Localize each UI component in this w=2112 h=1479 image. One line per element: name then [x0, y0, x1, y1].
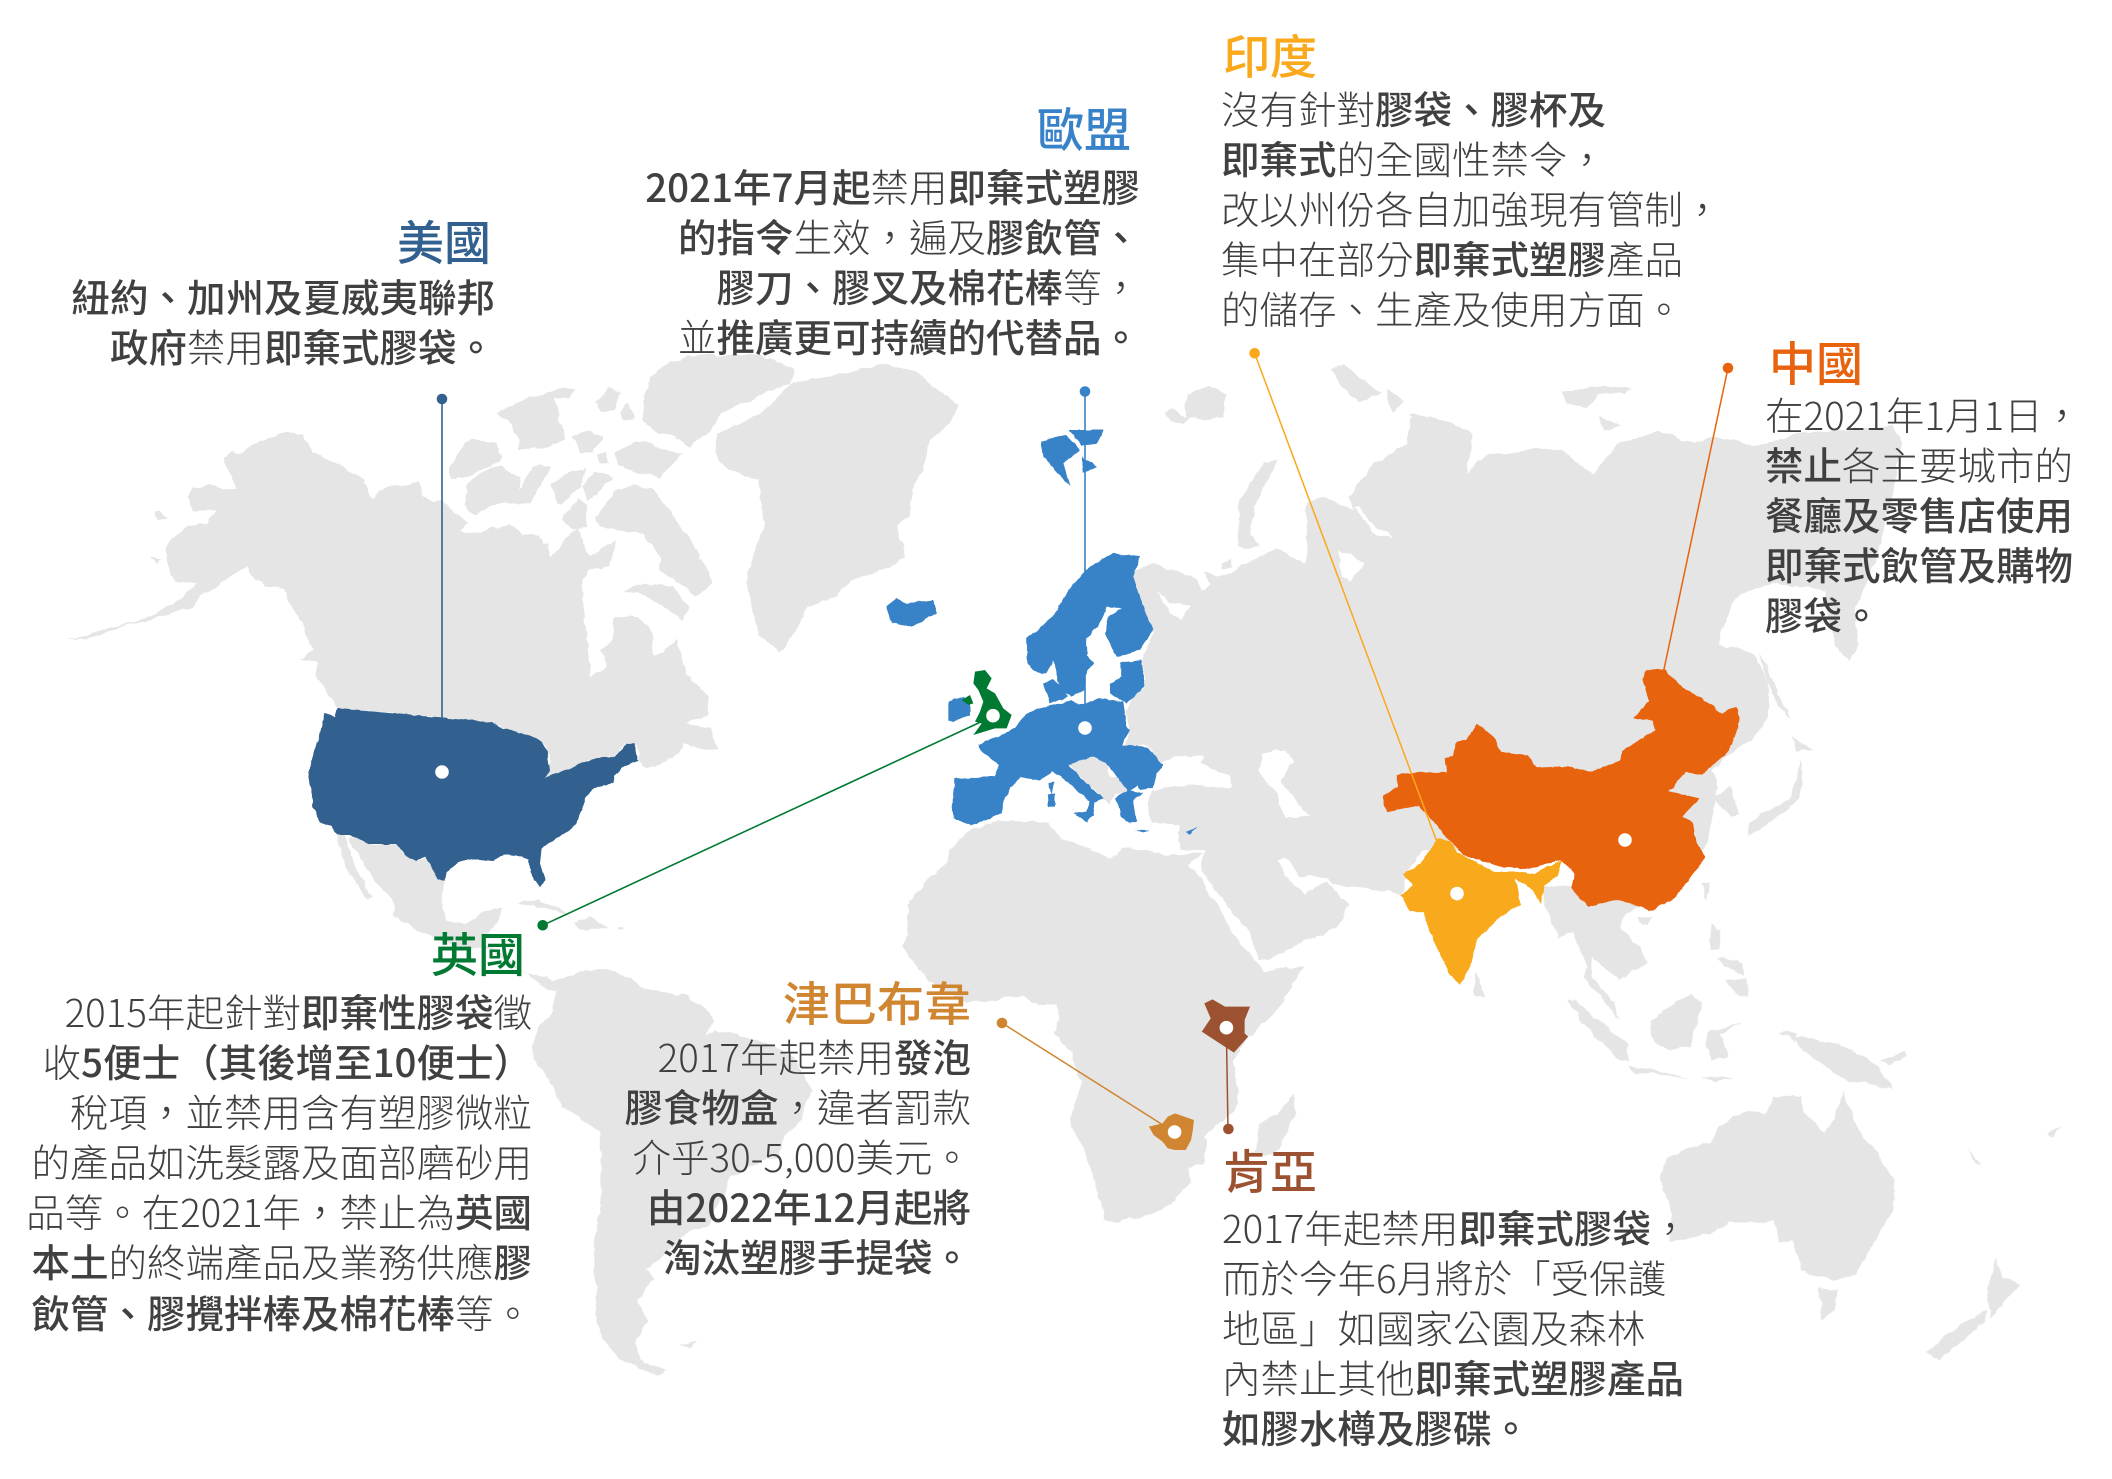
- Iceland: [886, 598, 937, 627]
- text: 津巴布韋: 由2022年12月起將: [647, 1178, 971, 1234]
- text: 中國: 餐廳及零售店使用: [1765, 486, 2073, 542]
- text: 印度: 的儲存、生產及使用方面。: [1221, 280, 1683, 336]
- text: 中國: 膠袋。: [1765, 586, 1881, 642]
- text: 英國: 本土的終端產品及業務供應膠: [31, 1233, 532, 1289]
- text: 歐盟: [645, 158, 1140, 364]
- text: 津巴布韋: 介乎30-5,000美元。: [632, 1128, 971, 1184]
- Africa, Madagascar, Middle East: [904, 820, 1460, 1222]
- China shape: [1383, 669, 1740, 912]
- text: 印度: 集中在部分即棄式塑膠產品: [1221, 230, 1683, 286]
- European Union: [886, 386, 1197, 834]
- text: 中國: 即棄式飲管及購物: [1765, 536, 2073, 592]
- text: 歐盟: 的指令生效，遍及膠飲管、: [678, 208, 1140, 264]
- East Asia islands, South Asia: [1474, 652, 1814, 997]
- text: 津巴布韋: 膠食物盒，違者罰款: [624, 1078, 971, 1134]
- text: 津巴布韋: 淘汰塑膠手提袋。: [663, 1228, 971, 1284]
- Kenya leader line: [1227, 1045, 1228, 1129]
- text: 中國: [1765, 386, 2081, 642]
- North America east and Arctic islands: [423, 355, 960, 777]
- Greenland: [715, 363, 960, 652]
- text: 英國: 飲管、膠攪拌棒及棉花棒等。: [31, 1284, 532, 1340]
- text: 津巴布韋: [624, 1028, 971, 1284]
- text: 印度: [1221, 80, 1722, 336]
- panel: 印度: [1206, 19, 1722, 1046]
- Zimbabwe leader line: [1002, 1023, 1163, 1125]
- heading: 印度: 印度: [1223, 19, 1317, 88]
- text: 歐盟: 並推廣更可持續的代替品。: [678, 308, 1140, 364]
- EU leader line: [1084, 391, 1086, 728]
- Kenya: [1202, 999, 1250, 1134]
- heading: 歐盟: 歐盟: [1037, 92, 1131, 161]
- text: 印度: 沒有針對膠袋、膠杯及: [1221, 80, 1606, 136]
- India leader line: [1255, 353, 1437, 842]
- EU shape: [948, 430, 1197, 834]
- text: 英國: 2015年起針對即棄性膠袋徵: [65, 983, 532, 1039]
- inland seas: [1153, 507, 1392, 818]
- USA leader line: [441, 399, 443, 730]
- text: 英國: 的產品如洗髮露及面部磨砂用: [31, 1133, 532, 1189]
- text: 歐盟: 2021年7月起禁用即棄式塑膠: [645, 158, 1140, 214]
- heading: 肯亞: 肯亞: [1223, 1134, 1317, 1203]
- China: [1383, 363, 1740, 912]
- Mexico, Central America, Caribbean: [337, 835, 625, 992]
- panel: 美國: [71, 205, 495, 374]
- Kenya shape: [1202, 999, 1250, 1053]
- grey land base: [65, 355, 2060, 1375]
- text: 肯亞: 2017年起禁用即棄式膠袋，: [1222, 1199, 1689, 1255]
- Zimbabwe shape: [1149, 1113, 1194, 1150]
- text: 英國: 收5便士（其後增至10便士）: [43, 1033, 532, 1089]
- heading: 英國: 英國: [431, 917, 525, 986]
- Zimbabwe: [997, 1018, 1194, 1150]
- text: 英國: 品等。在2021年，禁止為英國: [26, 1183, 532, 1239]
- text: 肯亞: 如膠水樽及膠碟。: [1222, 1399, 1530, 1455]
- China leader line: [1663, 368, 1728, 672]
- USA shape: [308, 708, 638, 887]
- text: 印度: 即棄式的全國性禁令，: [1221, 130, 1606, 186]
- panel: 英國: [26, 917, 532, 1340]
- panel: 歐盟: [645, 92, 1140, 364]
- UK shape: [962, 670, 1012, 735]
- heading: 美國: 美國: [397, 205, 491, 274]
- India: [1249, 348, 1562, 985]
- text: 津巴布韋: 2017年起禁用發泡: [658, 1028, 971, 1084]
- text: 肯亞: 內禁止其他即棄式塑膠產品: [1222, 1349, 1684, 1405]
- United States: [308, 394, 638, 887]
- text: 中國: 在2021年1月1日，: [1765, 386, 2081, 442]
- heading: 津巴布韋: 津巴布韋: [783, 966, 971, 1035]
- text: 中國: 禁止各主要城市的: [1765, 436, 2073, 492]
- panel: 中國: [1765, 326, 2081, 642]
- text: 印度: 改以州份各自加強現有管制，: [1221, 180, 1722, 236]
- Southeast Asia and Oceania: [1539, 887, 2060, 1360]
- heading: 中國: 中國: [1769, 326, 1863, 395]
- India shape: [1401, 838, 1562, 985]
- Eastern Europe and Turkey: [1068, 400, 1240, 825]
- South America: [532, 968, 813, 1375]
- text: 美國: 紐約、加州及夏威夷聯邦: [71, 268, 495, 324]
- text: 英國: [26, 983, 532, 1340]
- text: 肯亞: 而於今年6月將於「受保護: [1222, 1249, 1666, 1305]
- text: 肯亞: [1222, 1199, 1689, 1455]
- text: 美國: [71, 268, 495, 374]
- United Kingdom: [537, 670, 1012, 931]
- panel: 津巴布韋: [624, 966, 971, 1284]
- panel: 肯亞: [1222, 1134, 1689, 1455]
- text: 美國: 政府禁用即棄式膠袋。: [110, 318, 495, 374]
- text: 英國: 稅項，並禁用含有塑膠微粒: [70, 1083, 532, 1139]
- UK leader line: [543, 720, 985, 925]
- North America west: [65, 433, 593, 760]
- text: 歐盟: 膠刀、膠叉及棉花棒等，: [716, 258, 1140, 314]
- Russia and Central Asia: [1180, 365, 1903, 850]
- text: 肯亞: 地區」如國家公園及森林: [1222, 1299, 1646, 1355]
